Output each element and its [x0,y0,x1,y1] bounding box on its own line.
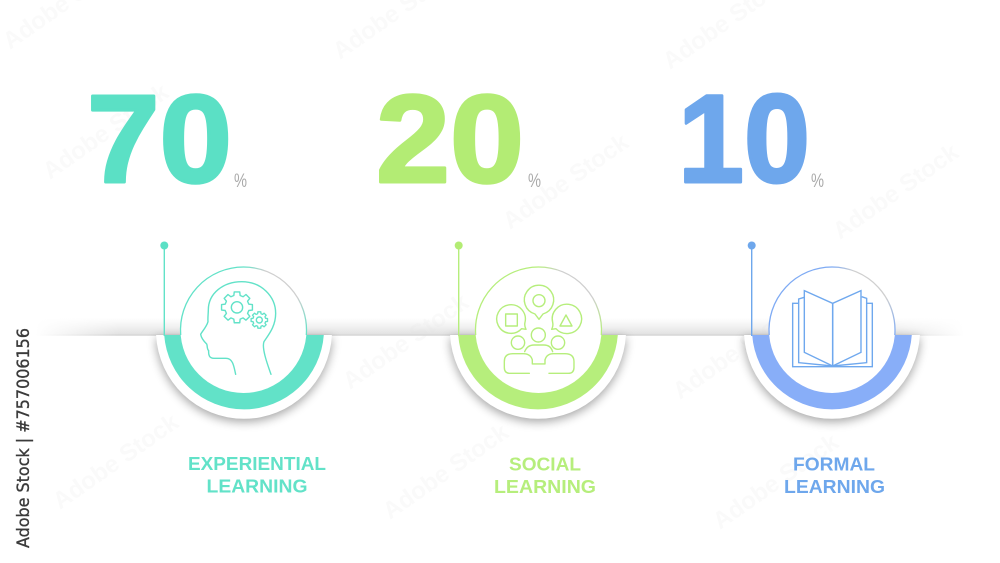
watermark pattern: Adobe Stock [498,128,634,235]
inner circle [180,267,306,393]
horizontal divider band [36,317,964,337]
vertical stock id text: Adobe Stock | #757006156 [14,328,34,548]
number: 10 percent: % [811,171,824,192]
panel: formal learning [744,242,920,497]
watermark pattern: Adobe Stock [708,428,844,535]
number: 10 percent: 10 [678,70,810,209]
watermark pattern: Adobe Stock [828,138,964,245]
panel: experiential learning [156,242,332,496]
number: 70 percent: % [234,171,247,192]
watermark pattern: Adobe Stock [338,288,474,395]
watermark pattern: Adobe Stock [668,298,804,405]
icon: head with gears [201,282,276,374]
number: 70 percent: 70 [87,70,232,209]
label [784,454,885,497]
connector pin [748,242,756,336]
icon: open book [793,291,872,367]
watermark pattern: Adobe Stock [48,408,184,515]
label: LEARNING [494,477,596,497]
label: EXPERIENTIAL [188,454,326,474]
label [188,454,326,496]
progress band [458,335,618,409]
outer disc [156,335,332,422]
connector pin [455,242,463,336]
label: LEARNING [206,476,308,496]
outer disc [450,335,626,422]
progress band [164,335,324,409]
watermark pattern: Adobe Stock [38,78,174,185]
watermark pattern: Adobe Stock [378,418,514,525]
outer disc [744,335,920,422]
label: SOCIAL [509,454,581,474]
label [494,454,596,497]
label: LEARNING [784,477,885,497]
label: FORMAL [793,454,875,474]
icon: group with speech bubbles [497,285,582,373]
number: 20 percent: 20 [376,70,524,209]
connector pin [160,242,168,336]
panel: social learning [450,242,626,497]
number: 20 percent: % [528,171,541,192]
progress band [752,335,912,409]
inner circle [476,267,602,393]
inner circle [769,267,895,393]
